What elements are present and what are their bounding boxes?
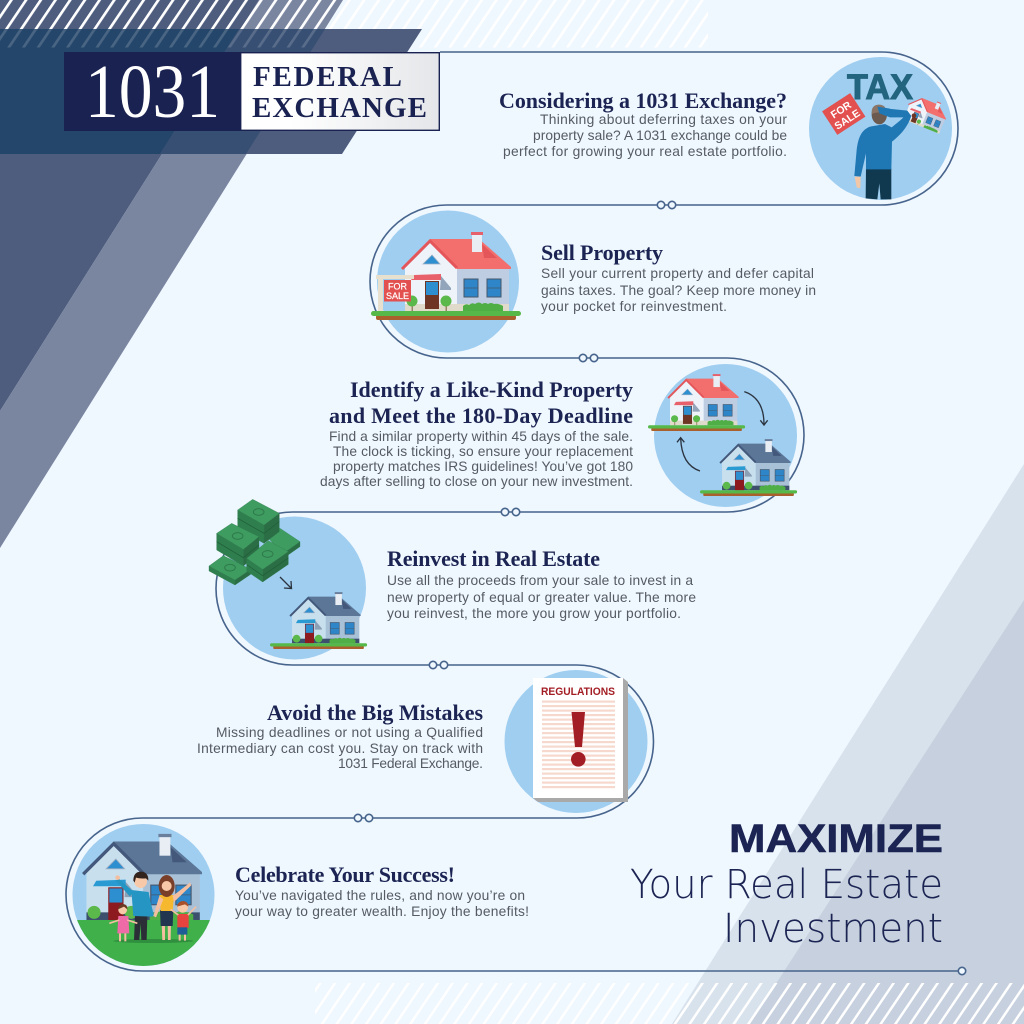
step 4 text bbox=[387, 573, 696, 621]
timeline connector path bbox=[66, 52, 966, 975]
logo: FEDERAL bbox=[253, 61, 402, 93]
step 5 text bbox=[197, 725, 483, 771]
step 5 text: Missing deadlines or not using a Qualified bbox=[216, 725, 483, 740]
step 1 text: Thinking about deferring taxes on your bbox=[540, 112, 787, 127]
step 3: identify a like-kind property bbox=[320, 364, 797, 507]
step 2 icon: house for sale bbox=[371, 210, 521, 352]
step 1: considering a 1031 exchange bbox=[499, 57, 952, 200]
logo: 1031 bbox=[85, 50, 220, 134]
step 2 heading: Sell Property bbox=[541, 240, 663, 265]
step 3 heading: and Meet the 180-Day Deadline bbox=[329, 403, 633, 428]
step 3 text: Find a similar property within 45 days of the sale. bbox=[329, 429, 633, 444]
step 5 icon: regulations document: REGULATIONS bbox=[541, 686, 615, 698]
step 5 heading: Avoid the Big Mistakes bbox=[267, 700, 483, 725]
step 6 heading: Celebrate Your Success! bbox=[235, 862, 455, 887]
step 1 icon: man looking at tax and house bbox=[809, 57, 952, 200]
step 6 text: You’ve navigated the rules, and now you’re on bbox=[235, 888, 525, 903]
step 2 text: Sell your current property and defer capital bbox=[541, 266, 814, 281]
step 3 text: days after selling to close on your new investment. bbox=[320, 474, 633, 489]
step 3 text bbox=[320, 429, 633, 489]
step 3 heading bbox=[329, 377, 633, 428]
step 2 text bbox=[541, 266, 816, 314]
step 4 heading: Reinvest in Real Estate bbox=[387, 546, 600, 571]
step 6 text bbox=[235, 888, 529, 919]
logo bbox=[64, 50, 439, 134]
step 1 text: property sale? A 1031 exchange could be bbox=[533, 128, 787, 143]
step 1 icon: man looking at tax and house: TAX bbox=[847, 68, 914, 107]
step 2 icon: house for sale: FOR bbox=[388, 282, 407, 292]
step 5 text: 1031 Federal Exchange. bbox=[338, 756, 483, 771]
bottom right angled shapes bbox=[315, 464, 1024, 1024]
step 4 text: new property of equal or greater value. The more bbox=[387, 590, 696, 605]
step 2: sell property bbox=[371, 210, 816, 352]
step 3 heading: Identify a Like-Kind Property bbox=[350, 377, 633, 402]
step 3 icon: house exchange bbox=[648, 364, 797, 507]
step 4 text: you reinvest, the more you grow your portfolio. bbox=[387, 606, 681, 621]
step 1 text bbox=[503, 112, 787, 159]
closing title: MAXIMIZE bbox=[729, 817, 943, 861]
step 1 text: perfect for growing your real estate portfolio. bbox=[503, 144, 787, 159]
step 4 icon: money and house bbox=[209, 499, 367, 660]
step 1 icon: man looking at tax and house: FOR bbox=[829, 99, 854, 121]
step 2 icon: house for sale: SALE bbox=[386, 291, 409, 301]
closing title: Your Real Estate bbox=[630, 862, 943, 908]
step 6: celebrate your success bbox=[60, 824, 529, 970]
step 2 text: your pocket for reinvestment. bbox=[541, 299, 727, 314]
step 5: avoid the big mistakes bbox=[197, 670, 648, 813]
step 1 icon: man looking at tax and house: SALE bbox=[832, 107, 863, 133]
step 2 text: gains taxes. The goal? Keep more money in bbox=[541, 283, 816, 298]
step 6 text: your way to greater wealth. Enjoy the benefits! bbox=[235, 904, 529, 919]
top left angled shapes bbox=[0, 0, 708, 548]
step 4: reinvest in real estate bbox=[209, 499, 696, 660]
step 1 heading: Considering a 1031 Exchange? bbox=[499, 88, 787, 113]
logo: EXCHANGE bbox=[252, 92, 427, 124]
step 3 text: The clock is ticking, so ensure your replacement bbox=[333, 444, 633, 459]
step 3 text: property matches IRS guidelines! You’ve got 180 bbox=[333, 459, 633, 474]
step 5 text: Intermediary can cost you. Stay on track with bbox=[197, 741, 483, 756]
step 6 icon: family in front of house bbox=[72, 824, 214, 966]
step 5 icon: regulations document bbox=[504, 670, 648, 813]
step 4 text: Use all the proceeds from your sale to invest in a bbox=[387, 573, 693, 588]
closing title: Investment bbox=[723, 906, 943, 952]
closing title bbox=[630, 817, 943, 952]
